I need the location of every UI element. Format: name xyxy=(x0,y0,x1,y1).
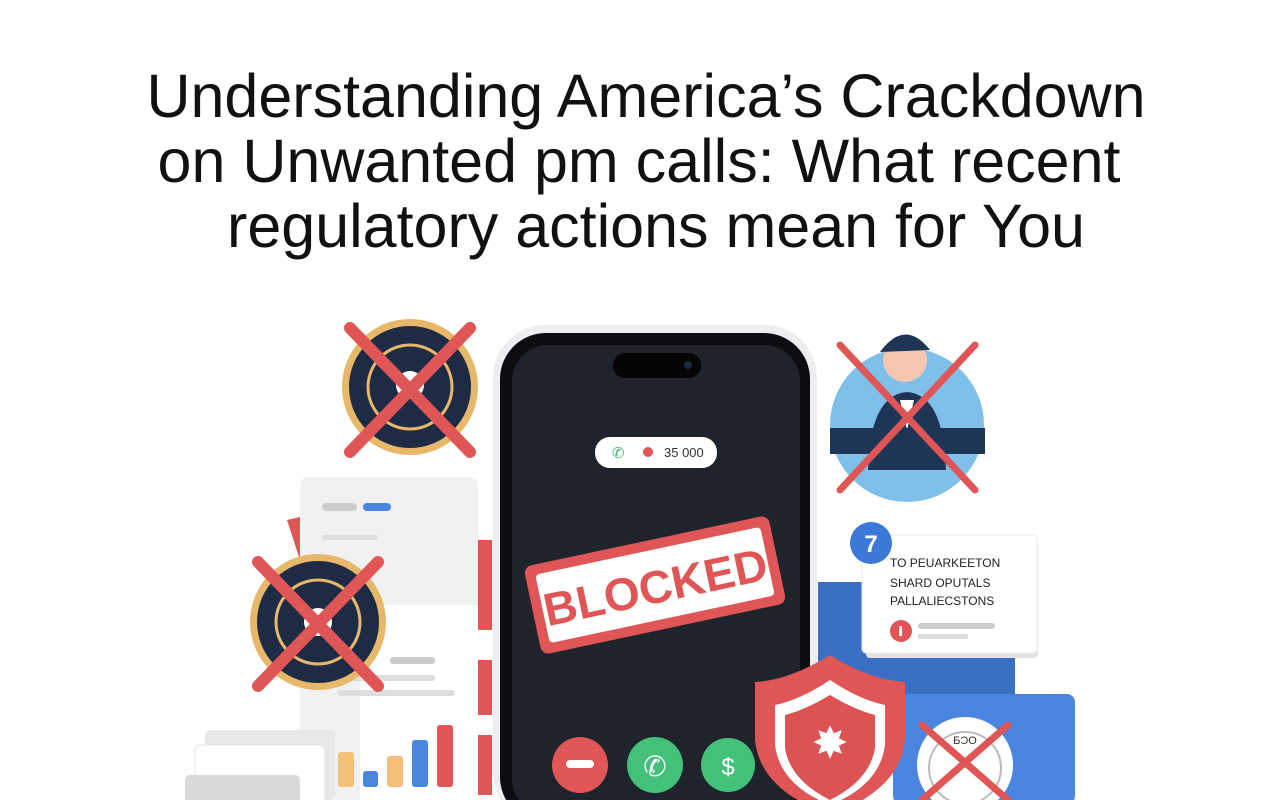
icon: crossed person xyxy=(830,334,985,502)
bar chart xyxy=(338,725,453,787)
icon: crossed badge top xyxy=(342,319,478,455)
icon: shield xyxy=(755,655,905,800)
icon: crossed globe: ƂƆO xyxy=(953,735,977,747)
icon: shield: ✸ xyxy=(812,719,848,768)
title xyxy=(146,62,1146,260)
callout card: TO PEUARKEETON xyxy=(890,556,1000,570)
title: on Unwanted pm calls: What recent xyxy=(158,127,1120,195)
title: Understanding America’s Crackdown xyxy=(146,62,1146,130)
call notification pill xyxy=(595,437,717,468)
call notification pill: ✆ xyxy=(612,445,625,462)
callout card: SHARD OPUTALS xyxy=(890,576,990,590)
callout card: 7 xyxy=(864,531,878,558)
panel: left documents xyxy=(185,477,492,800)
icon: crossed globe xyxy=(917,717,1013,800)
BLOCKED stamp xyxy=(523,515,787,655)
call notification pill: 35 000 xyxy=(664,445,704,460)
callout card xyxy=(850,522,1038,658)
title: regulatory actions mean for You xyxy=(227,192,1085,260)
BLOCKED stamp: BLOCKED xyxy=(539,538,772,636)
call buttons: ✆ xyxy=(643,751,667,782)
call buttons: $ xyxy=(721,754,735,781)
callout card: PALLALIECSTONS xyxy=(890,594,994,608)
icon: crossed badge bottom xyxy=(250,554,386,690)
call buttons xyxy=(552,737,755,793)
phone xyxy=(493,325,817,800)
panel: right blue blocks xyxy=(818,582,1075,800)
